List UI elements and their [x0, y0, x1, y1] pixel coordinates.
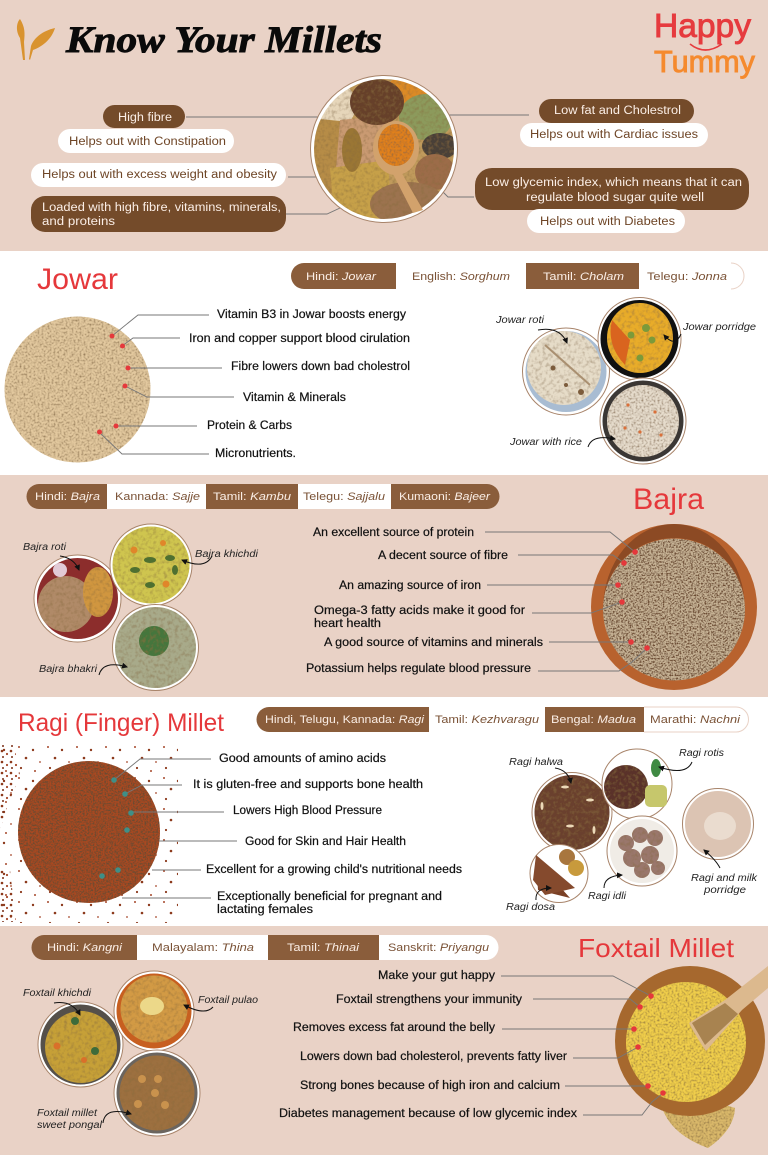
- dish captions: [23, 988, 258, 1131]
- benefit list: It is gluten-free and supports bone health: [193, 779, 423, 791]
- benefit pill: weight: Helps out with excess weight and obesity: [42, 169, 277, 181]
- logo: Happy Tummy: Happy: [654, 7, 752, 44]
- benefit pill: low fat: [539, 99, 694, 123]
- benefit list: Vitamin & Minerals: [243, 392, 346, 404]
- dish: ragi halwa: [532, 772, 612, 852]
- benefit list: Removes excess fat around the belly: [293, 1022, 495, 1034]
- regional names bar: Hindi: Bajra: [35, 491, 100, 503]
- dish: jowar with rice: [600, 378, 686, 464]
- dish: ragi rotis: [602, 749, 672, 819]
- regional names bar: Tamil: Thinai: [287, 942, 360, 954]
- benefit list: Good amounts of amino acids: [219, 753, 386, 765]
- panel: Ragi: [0, 707, 758, 923]
- heading: Ragi (Finger) Millet: Ragi (Finger) Millet: [18, 709, 224, 737]
- dish: ragi dosa: [530, 844, 588, 902]
- benefit list: Protein & Carbs: [207, 420, 292, 432]
- benefit list: Omega-3 fatty acids make it good for: [314, 605, 525, 617]
- benefit pill: nutrients: and proteins: [42, 216, 115, 228]
- benefit list: Iron and copper support blood cirulation: [189, 333, 410, 345]
- benefit list: An amazing source of iron: [339, 580, 481, 592]
- dish: bajra bhakri: [112, 604, 198, 690]
- dish captions: Foxtail millet: [37, 1108, 98, 1119]
- heading: Jowar: Jowar: [37, 263, 118, 296]
- benefit pill: constipation: [58, 129, 234, 153]
- regional names bar: Tamil: Kambu: [213, 491, 291, 503]
- benefit list: Excellent for a growing child's nutritional needs: [206, 864, 462, 876]
- panel: Foxtail Millet: [23, 933, 768, 1148]
- dish: bajra roti: [34, 555, 121, 642]
- regional names bar: Marathi: Nachni: [650, 714, 741, 726]
- benefit pill: diabetes: [527, 209, 685, 233]
- benefit list: Vitamin B3 in Jowar boosts energy: [217, 309, 406, 321]
- benefit pill: diabetes: Helps out with Diabetes: [540, 216, 675, 228]
- benefit pill: cardiac: Helps out with Cardiac issues: [530, 129, 698, 141]
- benefit list: lactating females: [217, 904, 313, 916]
- benefit connector lines: [114, 759, 237, 898]
- dish: foxtail khichdi: [38, 1002, 123, 1087]
- dish captions: [495, 315, 756, 448]
- regional names bar: Bengal: Madua: [551, 714, 636, 726]
- regional names bar: Sanskrit: Priyangu: [388, 942, 489, 954]
- benefit list: Potassium helps regulate blood pressure: [306, 663, 531, 675]
- icon: wheat ears: [17, 19, 55, 60]
- logo: Happy Tummy: Tummy: [654, 44, 755, 79]
- benefit pill: glycemic index: [475, 168, 749, 210]
- heading: Bajra: Bajra: [633, 483, 704, 516]
- benefit pill: weight: [31, 163, 286, 187]
- benefit list: Make your gut happy: [378, 970, 495, 982]
- heading: Foxtail Millet: Foxtail Millet: [578, 933, 735, 963]
- benefit pill: cardiac: [520, 123, 708, 147]
- dish: jowar roti: [522, 328, 610, 415]
- regional names bar: Telegu: Jonna: [647, 271, 727, 283]
- benefit list: heart health: [314, 618, 381, 630]
- regional names bar: Hindi: Kangni: [47, 942, 123, 954]
- benefit pill: glycemic index: Low glycemic index, which means that it can: [485, 177, 742, 189]
- dish: bajra khichdi: [110, 524, 192, 606]
- benefit list: An excellent source of protein: [313, 527, 474, 539]
- benefit list: Lowers down bad cholesterol, prevents fatty liver: [300, 1051, 567, 1063]
- dish: foxtail millet sweet pongal: [114, 1050, 200, 1136]
- dish captions: Foxtail pulao: [198, 995, 258, 1006]
- arrows to dishes: [54, 1002, 213, 1123]
- dish: jowar porridge: [598, 298, 681, 380]
- regional names bar: Telegu: Sajjalu: [303, 491, 385, 503]
- benefit list: A good source of vitamins and minerals: [324, 637, 543, 649]
- markers: [631, 993, 666, 1096]
- benefit connector lines: [501, 976, 663, 1115]
- benefit pill: glycemic index: regulate blood sugar quite well: [526, 192, 704, 204]
- regional names bar: Tamil: Kezhvaragu: [435, 714, 539, 726]
- photo: jowar grains: [4, 316, 150, 462]
- regional names bar: Hindi, Telugu, Kannada: Ragi: [265, 714, 425, 726]
- benefit list: [189, 309, 410, 460]
- benefit list: Diabetes management because of low glycemic index: [279, 1108, 577, 1120]
- arrows to dishes: [536, 762, 720, 900]
- dish captions: Jowar with rice: [509, 437, 582, 448]
- regional names bar: Kannada: Sajje: [115, 491, 200, 503]
- dish captions: Jowar porridge: [682, 322, 756, 333]
- dish captions: Bajra roti: [23, 542, 67, 553]
- dish: foxtail pulao: [114, 971, 194, 1051]
- panel: Bajra: [23, 483, 757, 690]
- arrows to dishes: [538, 329, 681, 447]
- dish captions: Ragi rotis: [679, 748, 724, 759]
- photo: foxtail millet in wooden bowl: [615, 966, 768, 1148]
- connector lines: [186, 101, 529, 214]
- regional names bar: [32, 935, 498, 960]
- regional names bar: Malayalam: Thina: [152, 942, 254, 954]
- regional names bar: [291, 263, 744, 289]
- icon: wooden scoop: [689, 966, 768, 1051]
- title: Know Your Millets: [65, 20, 382, 61]
- dish captions: Ragi halwa: [509, 757, 563, 768]
- photo: bajra in bowl: [591, 524, 757, 690]
- benefit connector lines: [99, 315, 234, 454]
- benefit list: Lowers High Blood Pressure: [233, 805, 382, 817]
- dish captions: [506, 748, 758, 913]
- dish captions: [23, 542, 259, 675]
- benefit list: Strong bones because of high iron and calcium: [300, 1080, 560, 1092]
- icon: wooden spoon: [373, 121, 423, 213]
- photo: assorted millets: [308, 75, 460, 226]
- panel: Jowar: [4, 263, 756, 464]
- benefit pill: high fibre: [103, 105, 185, 128]
- dish: ragi and milk porridge: [682, 788, 754, 860]
- markers: [99, 777, 134, 879]
- photo: ragi grains: [0, 745, 178, 923]
- benefit list: Fibre lowers down bad cholestrol: [231, 361, 410, 373]
- benefit list: [193, 753, 462, 916]
- benefit list: [306, 527, 543, 675]
- benefit pill: nutrients: Loaded with high fibre, vitamins, minerals,: [42, 202, 281, 214]
- regional names bar: Tamil: Cholam: [543, 271, 624, 283]
- dish captions: Bajra bhakri: [39, 664, 98, 675]
- arrows to dishes: [60, 556, 212, 675]
- regional names bar: Hindi: Jowar: [306, 271, 378, 283]
- regional names bar: [26, 484, 499, 509]
- dish captions: Ragi dosa: [506, 902, 555, 913]
- benefit connector lines: [485, 532, 647, 671]
- logo: Happy Tummy: [654, 7, 755, 79]
- regional names bar: English: Sorghum: [412, 271, 510, 283]
- panel: intro benefits: [17, 7, 755, 233]
- markers: [97, 334, 130, 434]
- benefit list: Good for Skin and Hair Health: [245, 836, 406, 848]
- benefit list: Micronutrients.: [215, 448, 296, 460]
- markers: [615, 549, 650, 651]
- benefit list: Exceptionally beneficial for pregnant and: [217, 891, 442, 903]
- dish captions: Foxtail khichdi: [23, 988, 92, 999]
- benefit list: [279, 970, 577, 1120]
- dish captions: Jowar roti: [495, 315, 545, 326]
- dish captions: Bajra khichdi: [195, 549, 259, 560]
- benefit pill: constipation: Helps out with Constipation: [69, 136, 226, 148]
- regional names bar: Kumaoni: Bajeer: [399, 491, 491, 503]
- benefit pill: low fat: Low fat and Cholestrol: [554, 105, 681, 117]
- benefit pill: high fibre: High fibre: [118, 112, 172, 124]
- benefit pill: nutrients: [31, 196, 286, 232]
- dish captions: Ragi and milk: [691, 873, 758, 884]
- dish captions: porridge: [703, 885, 746, 896]
- dish captions: Ragi idli: [588, 891, 627, 902]
- dish captions: sweet pongal: [37, 1120, 103, 1131]
- regional names bar: [256, 707, 748, 732]
- dish: ragi idli: [607, 816, 677, 886]
- benefit list: Foxtail strengthens your immunity: [336, 994, 522, 1006]
- benefit list: A decent source of fibre: [378, 550, 508, 562]
